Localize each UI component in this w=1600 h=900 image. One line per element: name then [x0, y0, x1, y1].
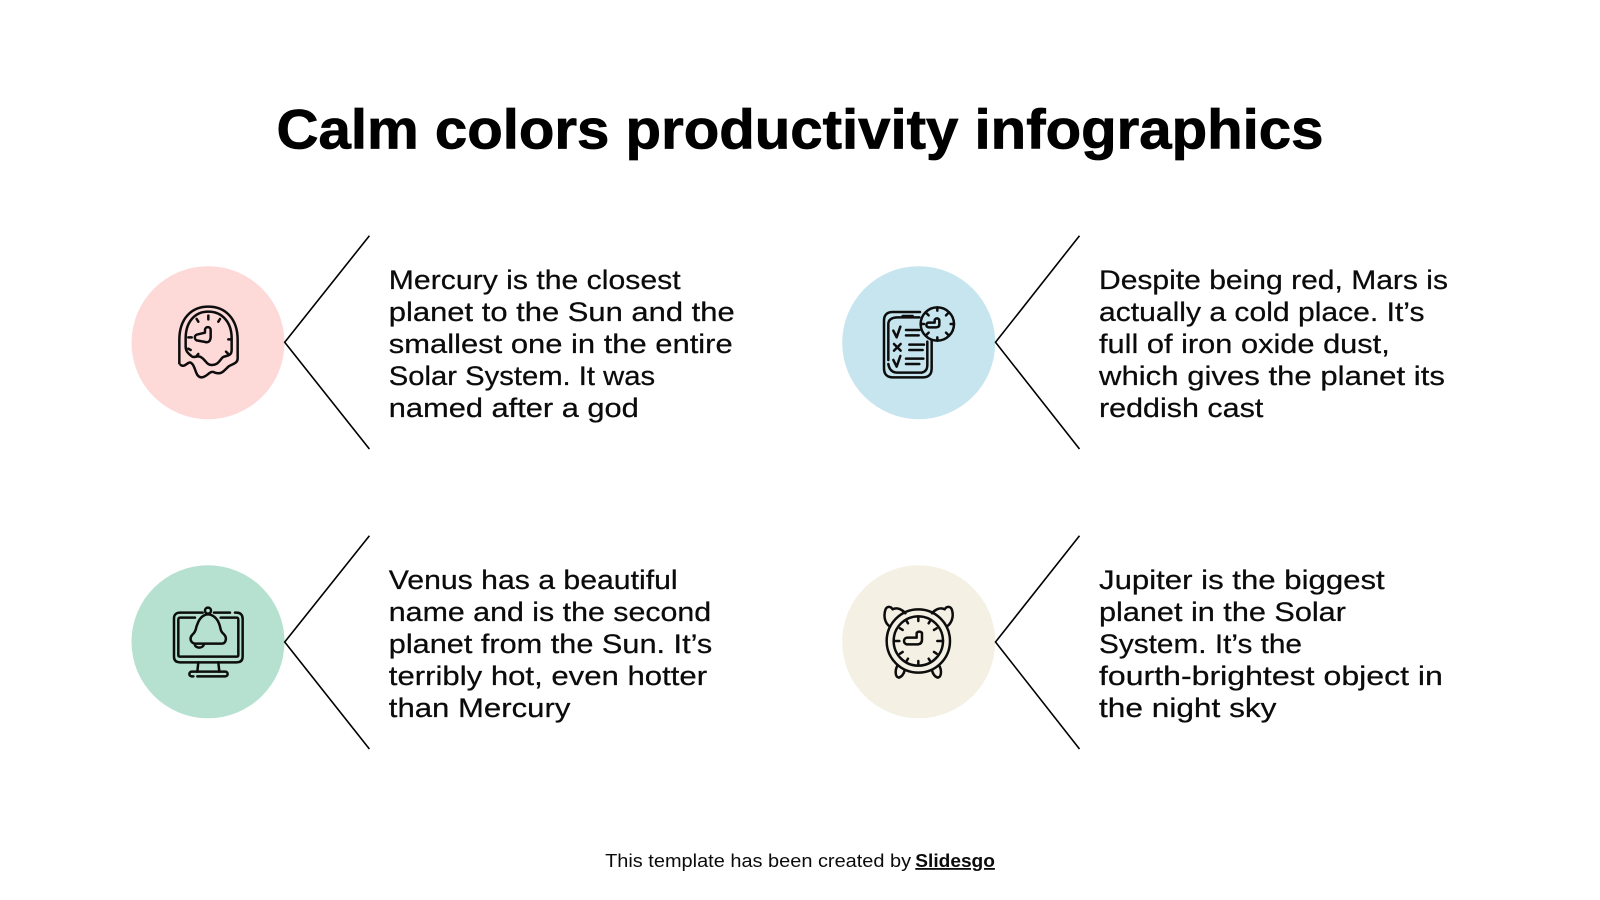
chevron lines	[285, 236, 369, 449]
text block: named after a god	[389, 393, 639, 423]
text block: terribly hot, even hotter	[389, 661, 707, 691]
icon: monitor with bell	[174, 608, 243, 676]
icon: alarm clock	[885, 607, 953, 678]
circle: green	[132, 565, 284, 718]
text block	[1098, 265, 1448, 423]
icon: melting clock	[179, 307, 238, 377]
chevron lines	[285, 536, 369, 749]
text block	[1099, 565, 1443, 723]
text block: reddish cast	[1099, 393, 1264, 423]
footer credit: This template has been created by	[605, 851, 911, 871]
text block: than Mercury	[389, 693, 571, 723]
text block: the night sky	[1099, 693, 1277, 723]
text block: name and is the second	[389, 597, 711, 627]
text block: full of iron oxide dust,	[1099, 329, 1390, 359]
panel: Mercury	[132, 236, 735, 449]
circle: blue	[842, 266, 995, 419]
icon: checklist with clock	[884, 307, 954, 377]
text block: actually a cold place. It’s	[1099, 297, 1424, 327]
text block: System. It’s the	[1099, 629, 1302, 659]
chevron lines	[996, 236, 1080, 449]
footer credit: Slidesgo	[915, 851, 995, 871]
text block	[389, 265, 735, 423]
text block: fourth-brightest object in	[1099, 661, 1443, 691]
panel: Jupiter	[842, 536, 1443, 749]
text block: Venus has a beautiful	[389, 565, 678, 595]
chevron lines	[996, 536, 1080, 749]
text block: Despite being red, Mars is	[1099, 265, 1448, 295]
text block: Solar System. It was	[389, 361, 655, 391]
panel: Venus	[132, 536, 712, 749]
text block: planet in the Solar	[1099, 597, 1346, 627]
panel: Mars	[842, 236, 1448, 449]
circle: pink	[132, 266, 284, 419]
text block: planet from the Sun. It’s	[389, 629, 712, 659]
text block: which gives the planet its	[1098, 361, 1445, 391]
text block: smallest one in the entire	[389, 329, 733, 359]
text block: Jupiter is the biggest	[1099, 565, 1385, 595]
text block: Mercury is the closest	[389, 265, 681, 295]
title: Calm colors productivity infographics	[276, 98, 1324, 160]
circle: cream	[842, 565, 995, 718]
text block: planet to the Sun and the	[389, 297, 735, 327]
text block	[389, 565, 712, 723]
